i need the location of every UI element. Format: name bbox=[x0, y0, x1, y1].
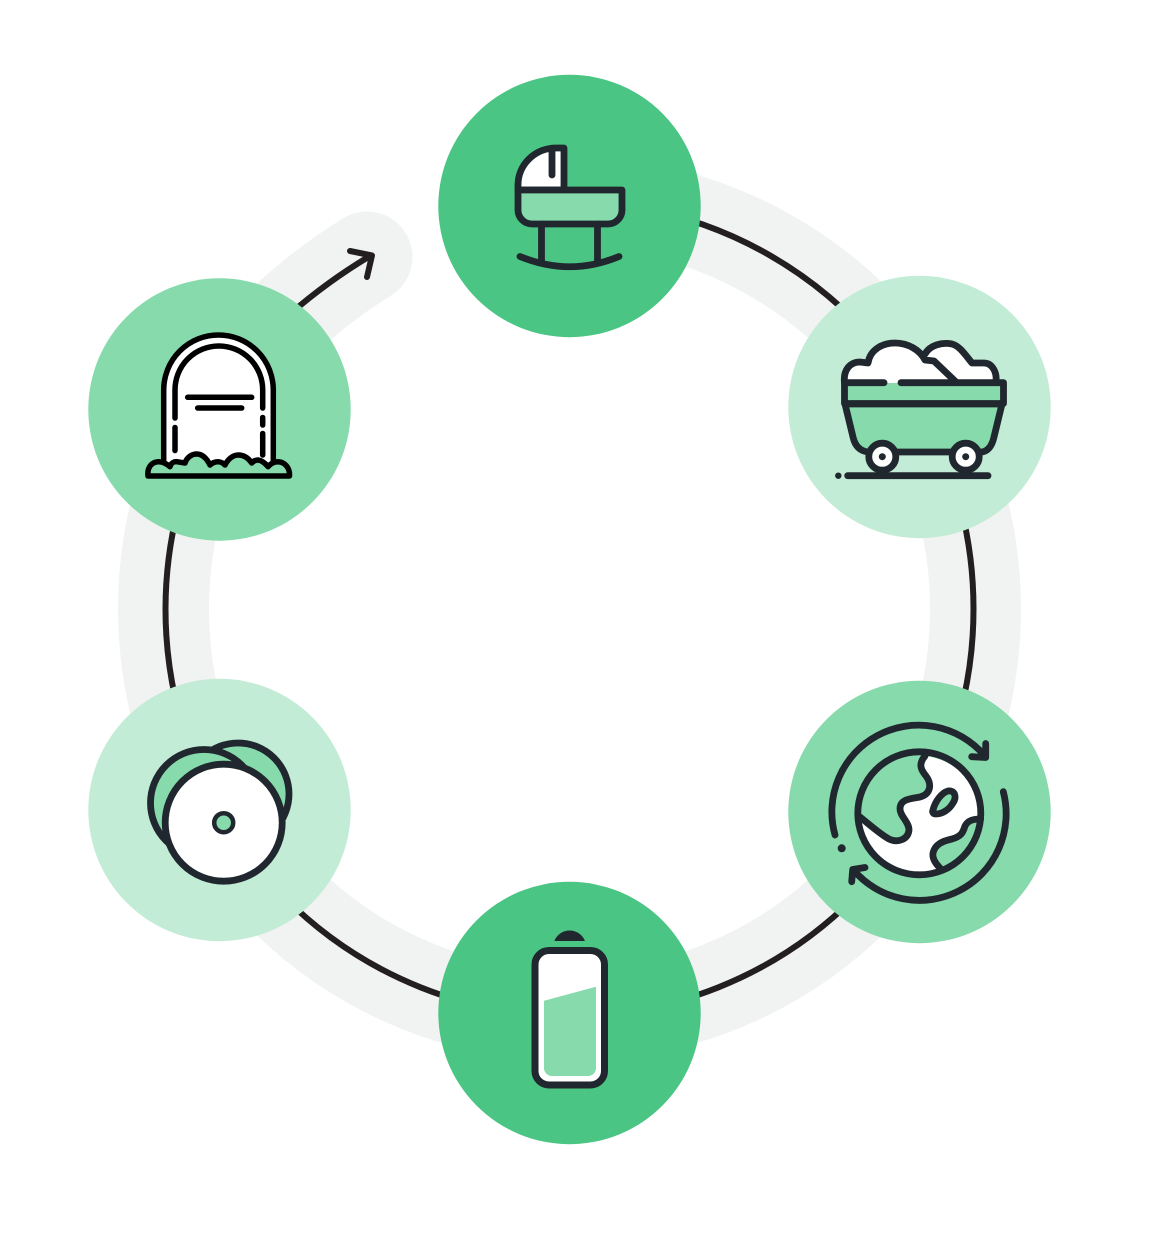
circle: battery bbox=[438, 882, 701, 1144]
circle: gravestone bbox=[88, 278, 351, 541]
icon: battery bbox=[535, 931, 604, 1085]
icon: gravestone bbox=[148, 335, 290, 476]
circle: mining cart bbox=[788, 276, 1051, 538]
circle: discs bbox=[88, 679, 351, 941]
dark cycle line with arrow bbox=[166, 208, 974, 1016]
grey cycle band bbox=[164, 208, 976, 1016]
circle: recycling globe bbox=[788, 681, 1051, 943]
icon: recycling globe bbox=[832, 725, 1006, 900]
icon: mining cart bbox=[835, 343, 1004, 479]
circle: crib bbox=[438, 75, 701, 337]
icon: crib bbox=[518, 148, 622, 267]
icon: discs bbox=[150, 743, 289, 881]
